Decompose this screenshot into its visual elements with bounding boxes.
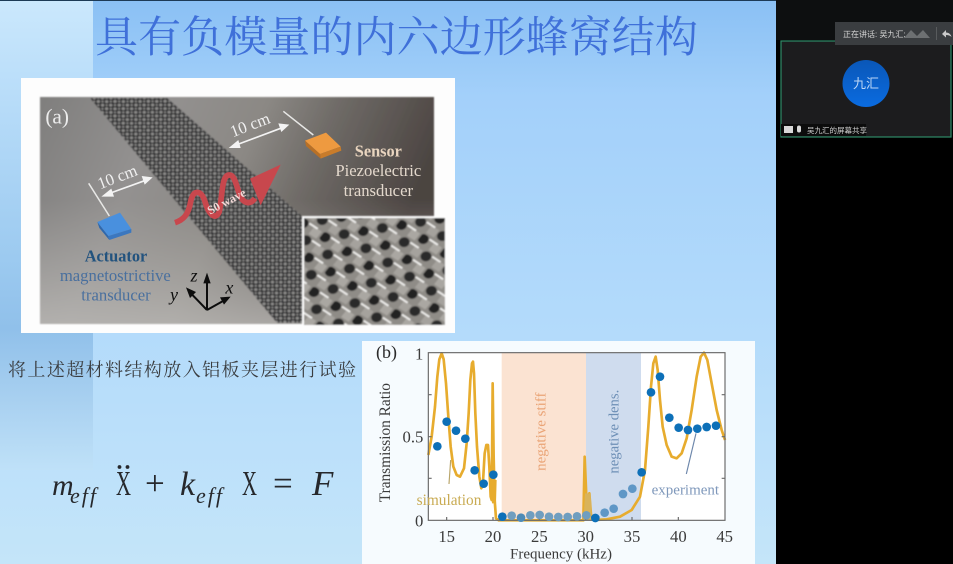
icon: actuator block <box>89 183 131 240</box>
simulation fill near 20 kHz <box>491 480 497 503</box>
sensor label: transducer <box>344 181 413 200</box>
icon: sensor block <box>283 111 341 159</box>
equation: eff <box>70 483 99 508</box>
icon: wave arrow <box>175 165 281 223</box>
dimension arrow: sensor side <box>227 109 289 148</box>
label (a): (a) <box>45 104 69 128</box>
band label: negative density: negative dens. <box>606 390 622 474</box>
equation <box>52 464 334 508</box>
x axis tick labels: 20 <box>485 527 501 546</box>
equation: X <box>242 464 257 503</box>
equation: k <box>180 466 196 503</box>
axis triad: y <box>168 285 178 305</box>
title: 具有负模量的内六边形蜂窝结构 <box>95 4 698 65</box>
equation: F <box>311 464 334 503</box>
actuator label: transducer <box>81 286 151 305</box>
equation: + <box>145 464 165 503</box>
experiment dots <box>433 372 720 522</box>
screen share label: 吴九汇的屏幕共享 <box>807 125 867 135</box>
avatar: 九汇 <box>853 76 879 91</box>
inset: lattice close-up <box>302 216 446 326</box>
simulation curve <box>428 353 725 520</box>
x axis tick labels <box>438 527 733 546</box>
sensor label: Piezoelectric <box>335 161 421 180</box>
simulation label <box>417 460 482 509</box>
axis triad <box>168 265 233 310</box>
band label: negative stiffness: negative stiff <box>533 392 549 471</box>
x axis tick labels: 15 <box>438 527 455 546</box>
y axis tick labels <box>403 344 423 531</box>
actuator label: Actuator <box>85 246 147 265</box>
equation: = <box>273 464 293 503</box>
dimension arrow: actuator side: 10 cm <box>95 161 140 193</box>
speaker tag: 正在讲话: 吴九汇; <box>843 29 906 39</box>
sidebar: meeting window <box>776 0 953 564</box>
equation: X <box>116 464 131 503</box>
video tile <box>781 41 951 137</box>
equation: m <box>52 469 74 502</box>
sensor label: Sensor <box>355 142 402 161</box>
y axis tick labels: 0.5 <box>403 428 423 447</box>
x axis tick labels: 30 <box>577 527 594 546</box>
icon: wave arrow: S0 wave <box>205 185 249 217</box>
x axis tick labels: 35 <box>624 527 640 546</box>
screen share label <box>781 124 867 136</box>
avatar <box>842 60 890 107</box>
actuator label <box>60 246 171 305</box>
actuator label: magnetostrictive <box>60 266 171 285</box>
description text: 将上述超材料结构放入铝板夹层进行试验 <box>8 356 356 382</box>
y axis tick labels: 1 <box>415 344 423 363</box>
panel: transmission chart (b) <box>362 341 755 564</box>
simulation label: simulation <box>417 492 482 509</box>
y axis tick labels: 0 <box>415 512 423 531</box>
y axis title: Transmission Ratio <box>377 383 394 502</box>
x axis tick labels: 40 <box>670 527 687 546</box>
panel: experiment setup photo (a) <box>21 78 455 333</box>
band: negative density <box>586 353 641 520</box>
dimension arrow: sensor side: 10 cm <box>227 109 273 141</box>
x axis tick labels: 45 <box>716 527 733 546</box>
photo: metal plate <box>40 97 434 324</box>
sensor label <box>335 142 421 200</box>
x axis tick labels: 25 <box>531 527 548 546</box>
x axis title: Frequency (kHz) <box>510 546 612 562</box>
band: negative stiffness <box>502 353 586 520</box>
axis triad: z <box>189 265 197 285</box>
photo annotations <box>45 104 421 310</box>
plot background <box>428 353 725 520</box>
equation: eff <box>196 483 225 508</box>
experiment label: experiment <box>652 483 720 499</box>
axis triad: x <box>224 277 233 297</box>
experiment label <box>652 433 720 499</box>
speaker tag <box>835 22 953 45</box>
frame <box>428 353 725 520</box>
simulation fill near 30 kHz <box>584 493 592 520</box>
panel label (b): (b) <box>376 342 397 363</box>
